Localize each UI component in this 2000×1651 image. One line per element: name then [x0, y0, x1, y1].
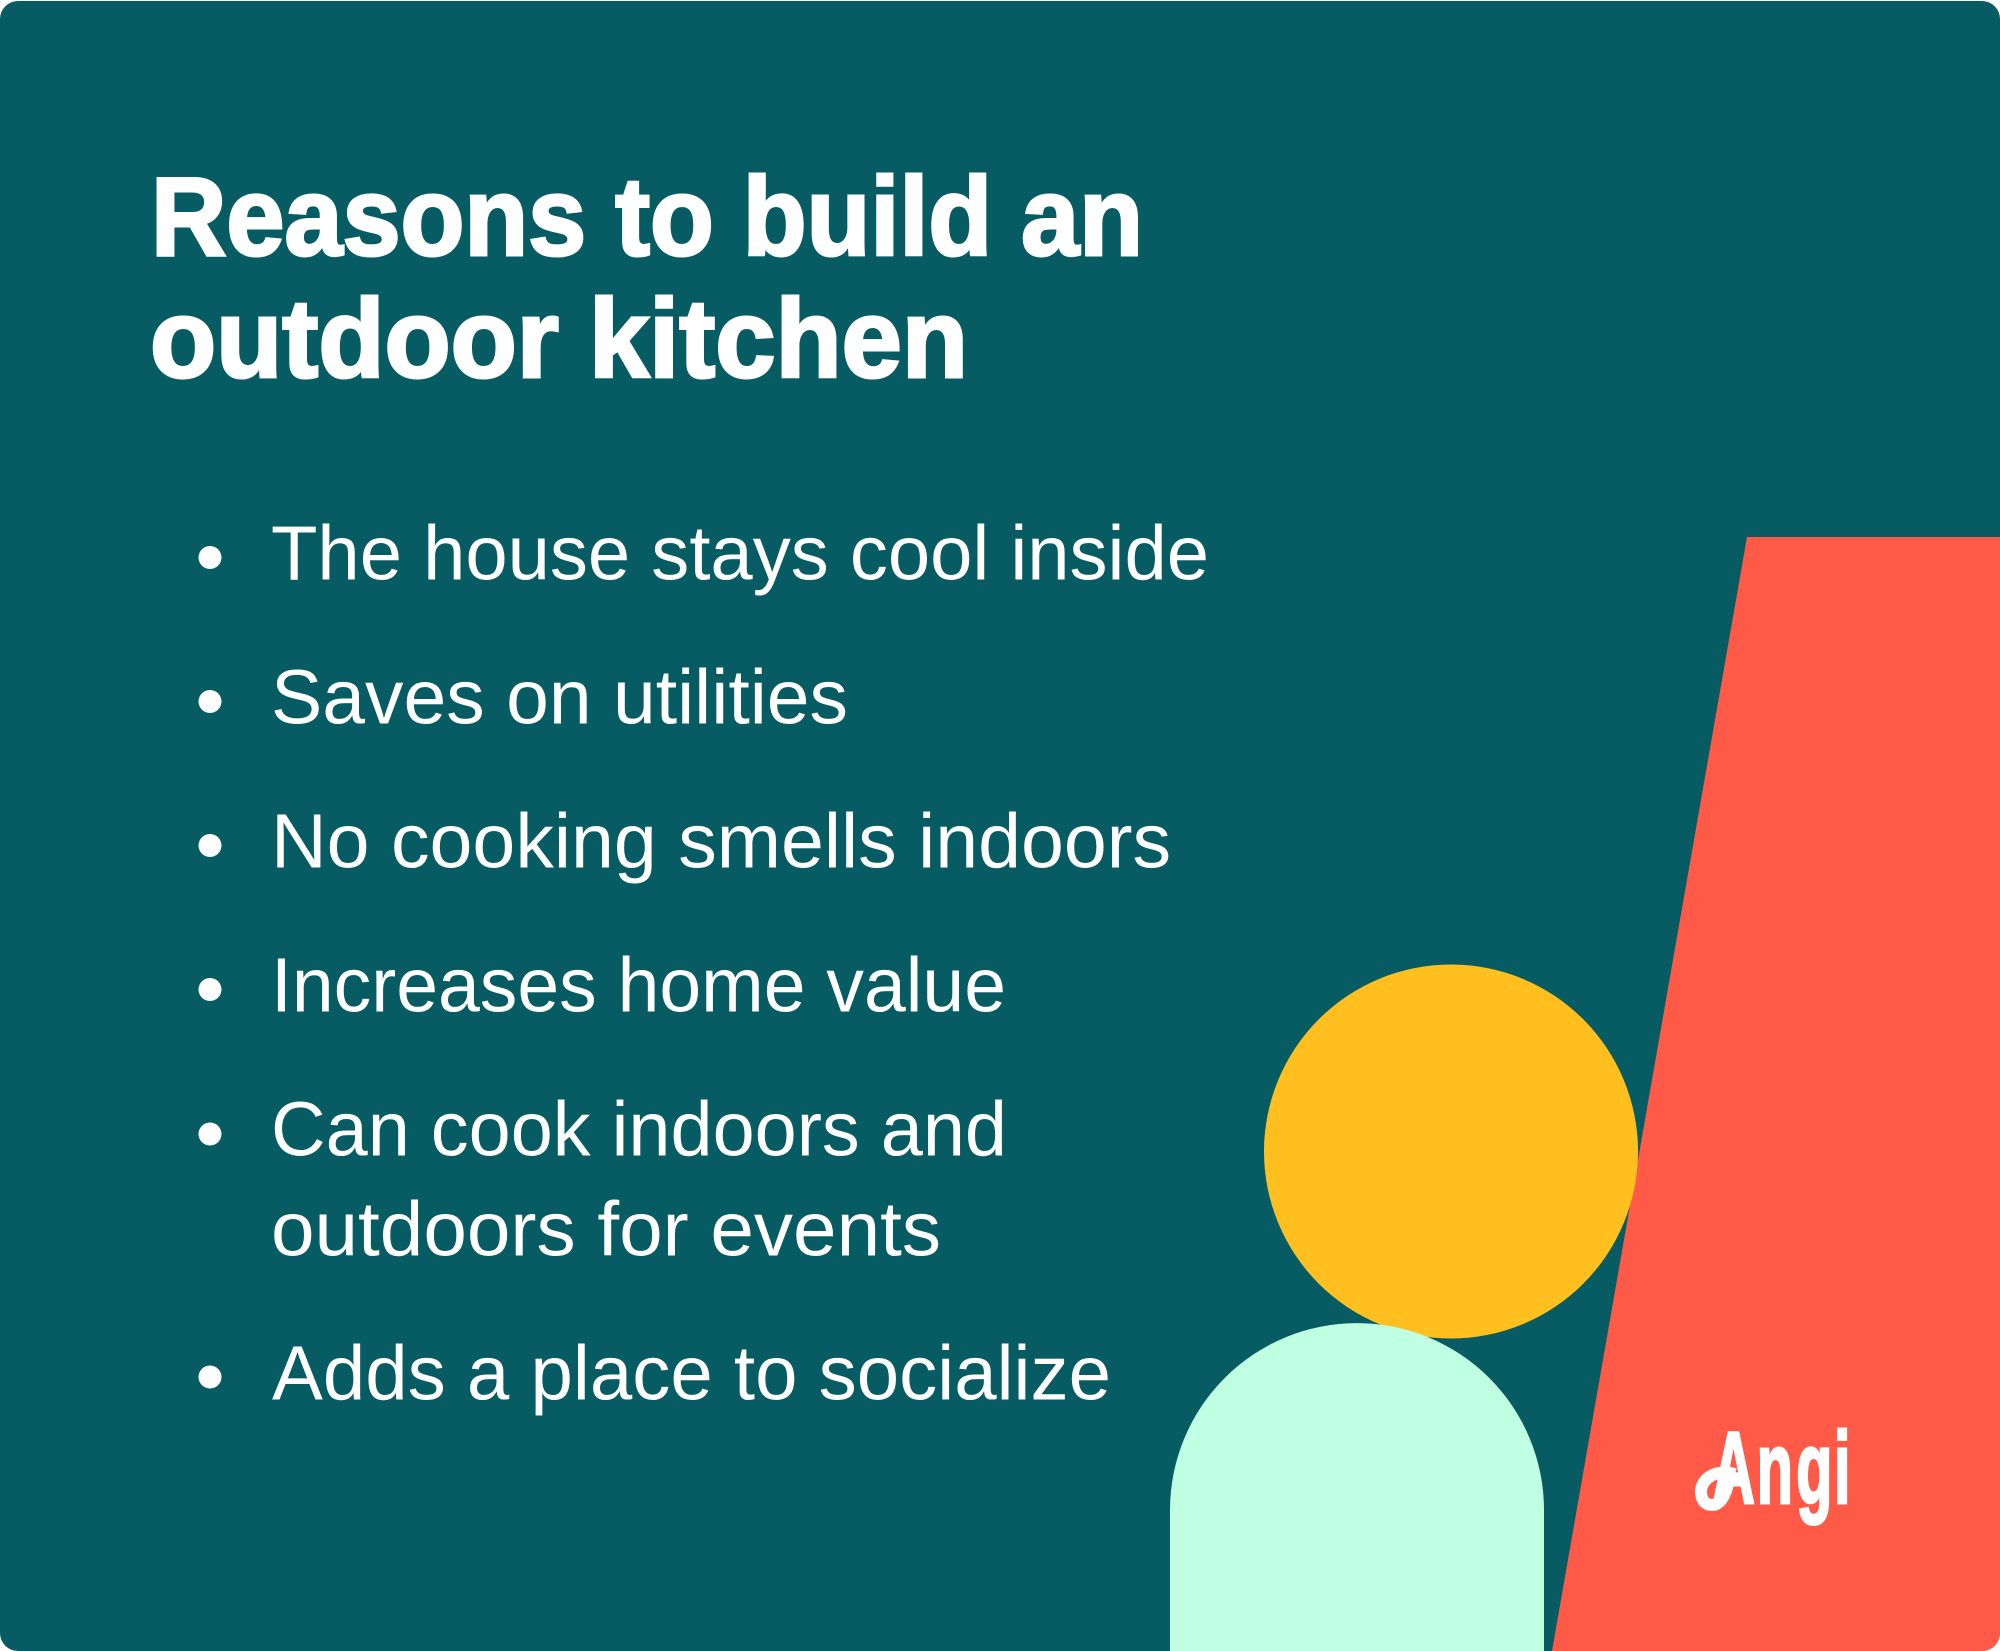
- list item: cook indoors and outdoors: Can cook indoors and: [271, 1086, 1007, 1172]
- list item: house stays cool: The house stays cool inside: [271, 510, 1209, 596]
- logo: Angi: Angi: [1712, 1411, 1850, 1525]
- list item: increases home value: Increases home value: [271, 942, 1006, 1028]
- title: outdoor kitchen: [150, 277, 968, 401]
- shape: red slanted panel: [1552, 537, 2000, 1651]
- title: Reasons to build an: [151, 155, 1143, 279]
- list item: saves on utilities: Saves on utilities: [271, 654, 848, 740]
- list item: no cooking smells: No cooking smells indoors: [271, 798, 1171, 884]
- shape: mint arch: [1170, 1323, 1544, 1651]
- list item: place to socialize: Adds a place to socialize: [272, 1330, 1111, 1416]
- list item: cook indoors and outdoors: [198, 1086, 1007, 1272]
- list item: cook indoors and outdoors: outdoors for events: [271, 1186, 941, 1272]
- title: [150, 155, 1143, 401]
- shape: yellow circle: [1264, 964, 1638, 1338]
- bullet list: [198, 510, 1209, 1416]
